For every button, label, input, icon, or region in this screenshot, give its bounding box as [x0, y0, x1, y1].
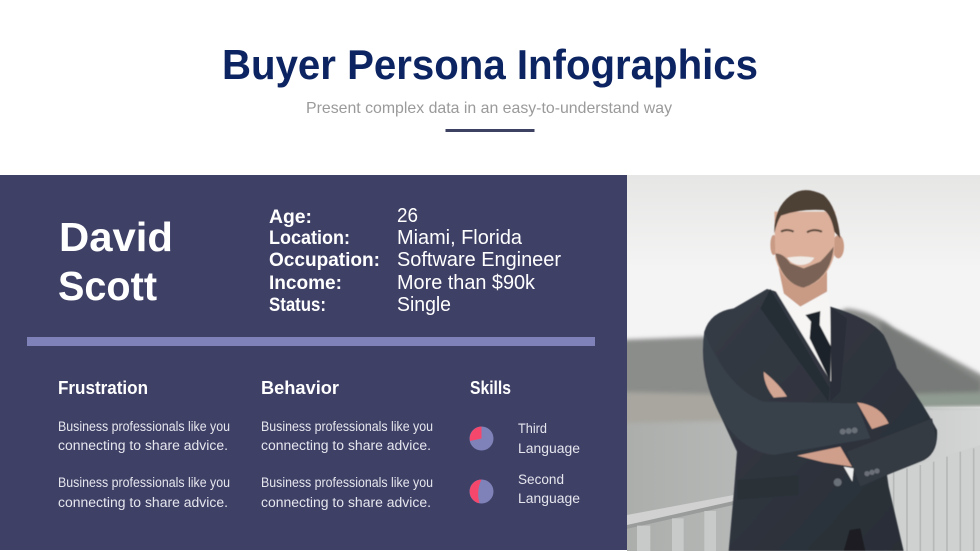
third language label	[518, 421, 580, 456]
persona detail labels: Location:	[269, 228, 350, 249]
persona detail labels: Occupation:	[269, 250, 380, 271]
persona detail values: More than $90k	[397, 272, 536, 294]
persona name: Scott	[58, 263, 157, 309]
column: frustration: Business professionals like you	[58, 475, 230, 490]
column: behavior	[261, 378, 433, 510]
persona detail values: 26	[397, 205, 418, 227]
persona detail labels	[269, 207, 380, 316]
neck	[779, 268, 827, 308]
persona name: David	[59, 214, 173, 260]
photo: smiling businessman with crossed arms on a bridge	[614, 175, 980, 551]
persona detail labels: Status:	[269, 295, 326, 316]
second language label	[518, 472, 580, 506]
column: skills	[470, 378, 580, 506]
column: behavior: Behavior	[261, 378, 339, 398]
column: frustration	[58, 378, 230, 510]
second language label: Language	[518, 491, 580, 506]
title: Buyer Persona Infographics	[222, 41, 758, 88]
persona detail values: Software Engineer	[397, 249, 561, 271]
icon: third language pie chart	[470, 426, 494, 450]
column: frustration: connecting to share advice.	[58, 495, 228, 510]
subtitle: Present complex data in an easy-to-understand way	[306, 100, 672, 117]
railing left	[627, 495, 734, 529]
title divider	[446, 129, 534, 132]
persona detail values	[397, 205, 561, 316]
face	[774, 212, 835, 288]
column: frustration: Frustration	[58, 378, 148, 398]
second language label: Second	[518, 472, 564, 487]
column: behavior: connecting to share advice.	[261, 495, 431, 510]
beard	[775, 247, 834, 288]
man figure	[703, 190, 937, 551]
sleeve highlight	[704, 332, 870, 455]
section divider	[27, 337, 595, 346]
column: behavior: Business professionals like you	[261, 475, 433, 490]
shirt	[774, 290, 832, 382]
column: behavior: Business professionals like you	[261, 419, 433, 434]
hands	[764, 372, 787, 398]
panel: persona profile	[0, 175, 627, 550]
lapels	[761, 288, 827, 390]
pocket	[737, 475, 799, 500]
smile	[787, 256, 814, 265]
tie	[805, 311, 831, 382]
railing right	[884, 445, 980, 551]
persona detail labels: Income:	[269, 273, 342, 294]
column: frustration: connecting to share advice.	[58, 438, 228, 453]
persona name	[58, 214, 173, 309]
persona detail labels: Age:	[269, 207, 312, 228]
persona detail values: Single	[397, 294, 451, 316]
column: skills: Skills	[470, 378, 511, 398]
third language label: Language	[518, 441, 580, 456]
suit	[703, 289, 937, 551]
hair	[774, 190, 840, 238]
eyes	[781, 230, 822, 232]
persona detail values: Miami, Florida	[397, 227, 523, 249]
icon: second language pie chart	[470, 480, 494, 504]
column: frustration: Business professionals like you	[58, 419, 230, 434]
ears	[770, 235, 777, 255]
third language label: Third	[518, 421, 547, 436]
column: behavior: connecting to share advice.	[261, 438, 431, 453]
trousers	[844, 528, 865, 551]
buttons	[834, 427, 880, 486]
